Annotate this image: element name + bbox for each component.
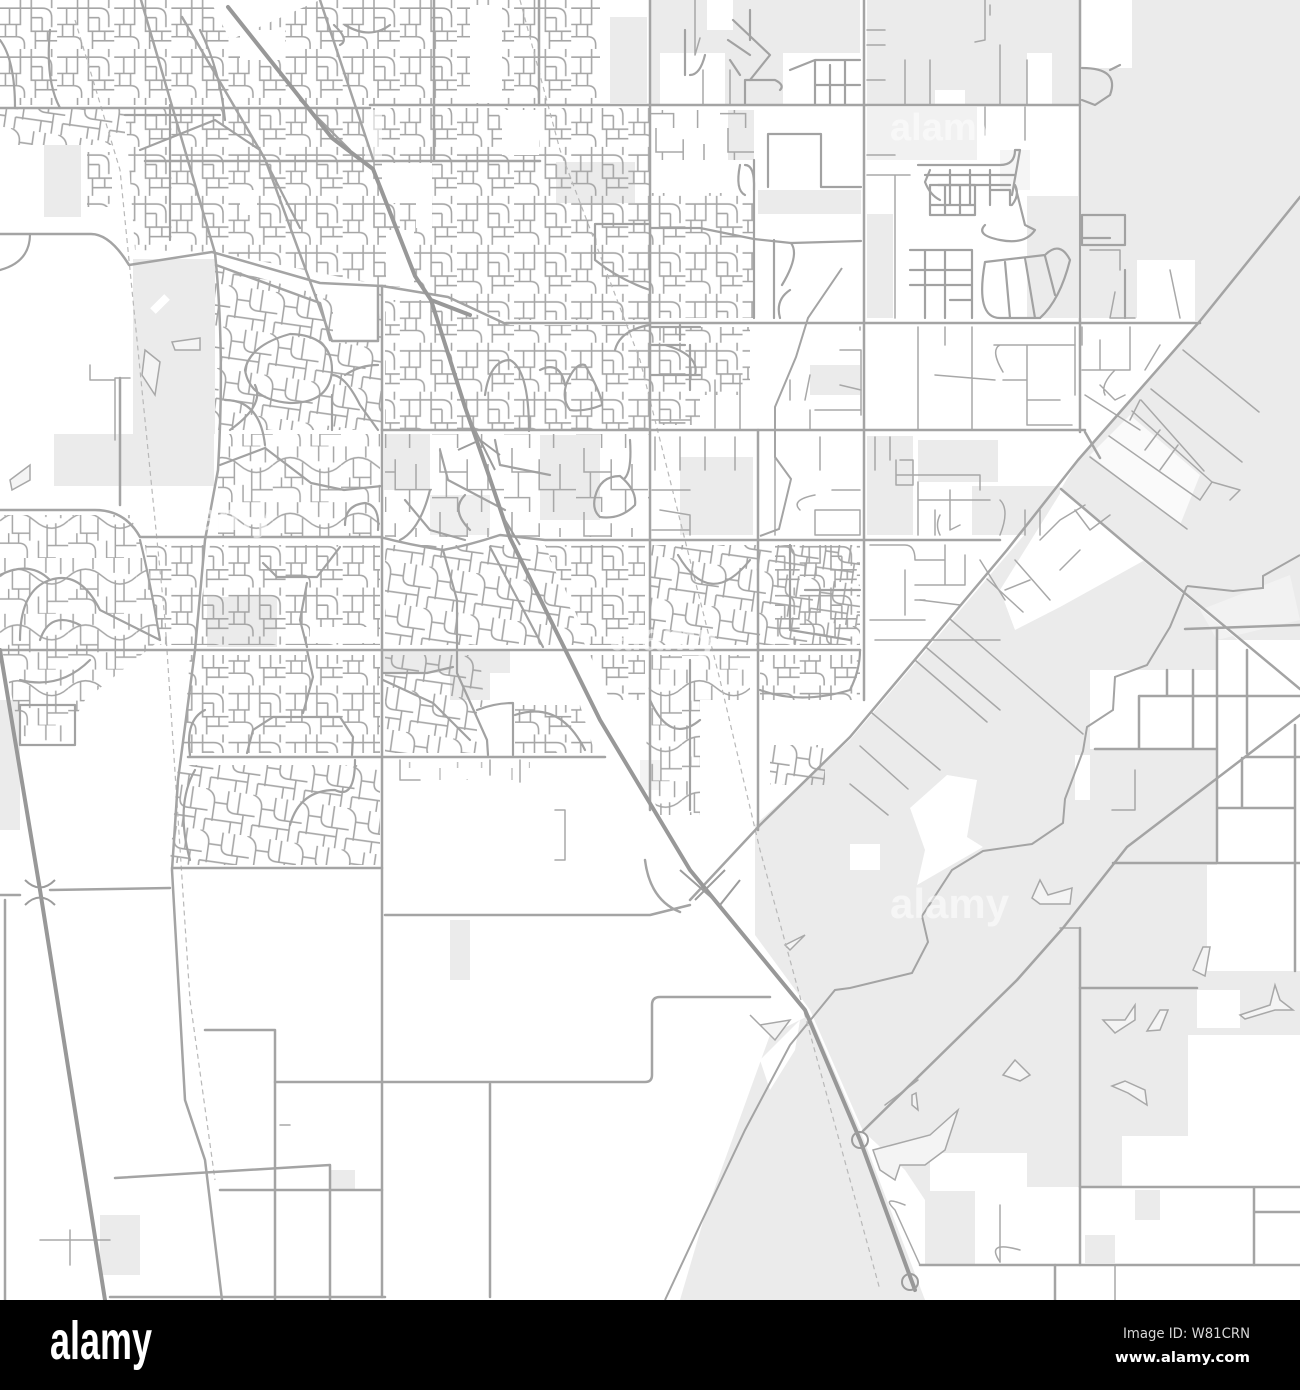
residential street grids [0,0,860,865]
faint watermarks: alamy [165,497,273,539]
footer bar [0,1300,1300,1390]
collector curves [0,25,860,860]
streams and river [665,268,1300,1300]
railway lines [75,0,880,1290]
diagonal side lanes [850,350,1259,815]
faint watermarks: alamy [890,880,1010,927]
subdivision: north-east neighbourhood [910,65,1125,318]
field grid roads [1080,625,1300,1265]
logo: alamy: alamy [50,1311,152,1371]
cluster: north central block [650,10,861,390]
white pockets between neighbourhoods [240,5,539,753]
image ID: Image ID: W81CRN [1123,1326,1250,1342]
white clearings [150,0,1300,1090]
freeways [0,7,915,1300]
faint watermarks [165,107,1010,927]
faint watermarks: alamy [890,107,998,149]
interchanges [25,420,918,1290]
website address: www.alamy.com [1115,1350,1250,1366]
ponds [10,338,1293,1180]
faint watermarks: alamy [610,617,718,659]
